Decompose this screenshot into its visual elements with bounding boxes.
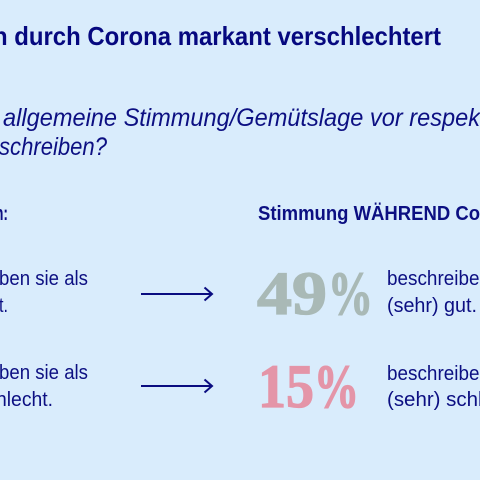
stat: 49 percent: 49 bbox=[257, 261, 327, 328]
question text bbox=[0, 104, 480, 161]
left text: good mood before: ben sie als bbox=[0, 267, 88, 290]
arrow: bad mood bbox=[141, 380, 212, 392]
right text: good mood during: (sehr) gut. bbox=[387, 294, 477, 317]
left text: bad mood before bbox=[0, 361, 88, 411]
right text: good mood during bbox=[387, 267, 480, 317]
title: n durch Corona markant verschlechtert bbox=[0, 21, 441, 51]
stat: 49 percent: % bbox=[328, 261, 373, 328]
stat: 15 percent: 15 bbox=[258, 354, 314, 421]
stat: 15 percent bbox=[258, 354, 359, 421]
stat: 15 percent: % bbox=[314, 354, 359, 421]
right text: bad mood during bbox=[387, 362, 480, 411]
stat: 49 percent bbox=[257, 261, 373, 328]
left text: bad mood before: ben sie als bbox=[0, 361, 88, 384]
arrow: good mood bbox=[141, 288, 212, 300]
question text: schreiben? bbox=[0, 133, 107, 161]
left text: good mood before bbox=[0, 267, 88, 317]
